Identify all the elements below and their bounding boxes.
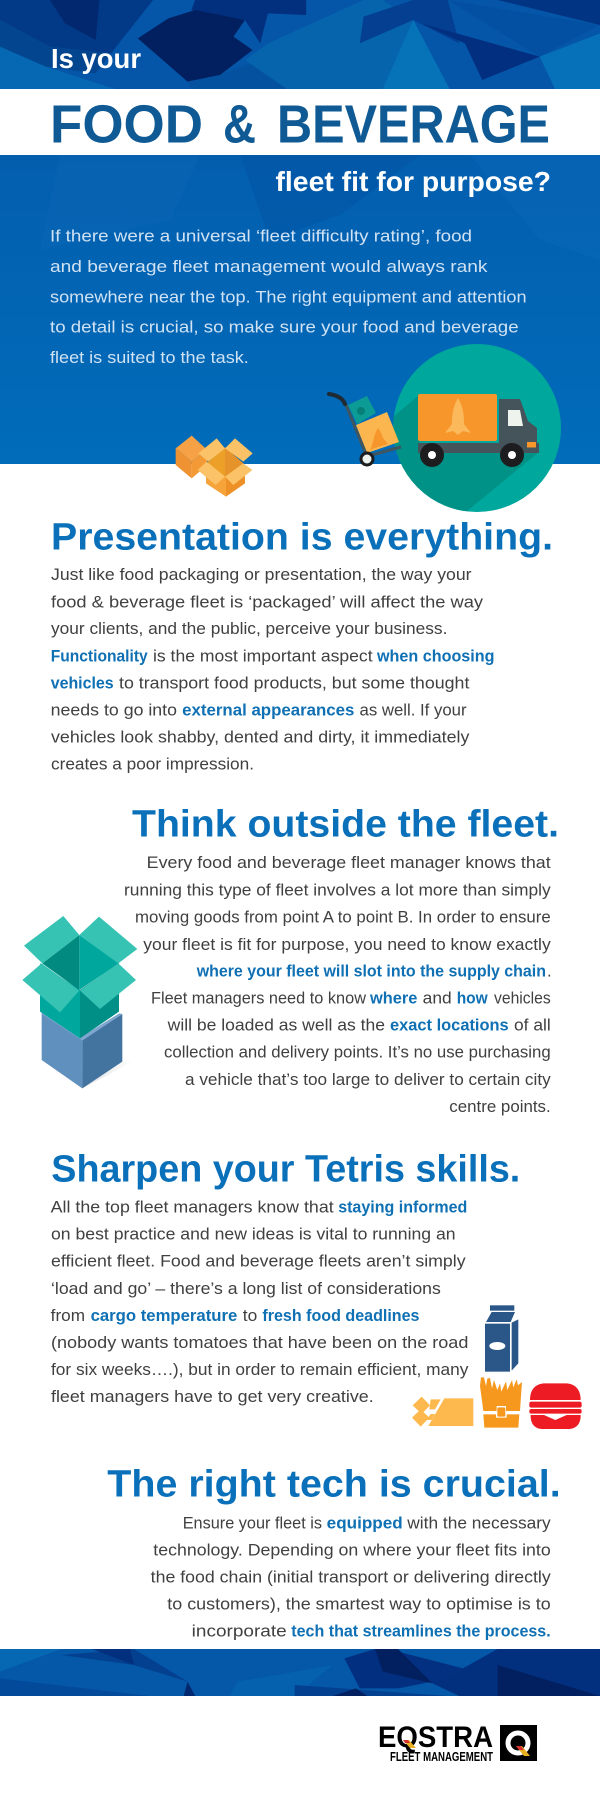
title: food and beverage: FOOD xyxy=(50,94,203,154)
body text: staying informed xyxy=(338,1199,467,1217)
body text: fresh food deadlines xyxy=(262,1307,420,1325)
title line: Is your: Is your xyxy=(51,43,141,74)
body text: exact locations xyxy=(390,1017,509,1035)
body text: how xyxy=(457,990,488,1008)
body text xyxy=(151,1514,551,1641)
body text: external appearances xyxy=(182,701,354,719)
body text: the food chain (initial transport or delivering directly xyxy=(151,1569,551,1587)
title: food and beverage xyxy=(50,94,550,154)
body text: incorporate xyxy=(192,1623,287,1641)
body text: cargo temperature xyxy=(91,1307,237,1325)
logo: Eqstra Fleet Management: FLEET MANAGEMENT xyxy=(390,1749,493,1764)
icon: yellow food box xyxy=(412,1397,473,1427)
body text: to xyxy=(243,1307,257,1325)
icon: burger xyxy=(529,1383,582,1429)
body text: a vehicle that’s too large to deliver to certain city xyxy=(185,1071,551,1089)
body text: efficient fleet. Food and beverage fleets aren’t simply xyxy=(51,1253,466,1271)
body text: Just like food packaging or presentation, the way your xyxy=(51,566,472,584)
body text: vehicles xyxy=(51,674,114,692)
intro text xyxy=(50,227,527,367)
body text: where xyxy=(369,990,417,1008)
body text: to customers), the smartest way to optimise is to xyxy=(167,1596,551,1614)
logo: Eqstra Fleet Management xyxy=(378,1721,537,1764)
body text: when choosing xyxy=(376,647,494,665)
footer band xyxy=(0,1649,600,1696)
body text: of all xyxy=(514,1017,551,1035)
icon: milk carton xyxy=(485,1305,518,1372)
icon: truck in teal circle xyxy=(393,344,561,512)
body text: as well. If your xyxy=(360,701,467,719)
body text: equipped xyxy=(327,1514,403,1532)
body text: All the top fleet managers know that xyxy=(51,1199,334,1217)
body text: Every food and beverage fleet manager knows that xyxy=(147,854,551,872)
body text xyxy=(51,1199,469,1406)
body text: your clients, and the public, perceive your business. xyxy=(51,620,447,638)
title band xyxy=(0,89,600,155)
intro text: fleet is suited to the task. xyxy=(50,348,249,367)
body text: from xyxy=(51,1307,85,1325)
body text: and xyxy=(423,990,452,1008)
body text: . xyxy=(547,963,552,981)
body text xyxy=(124,854,552,1116)
heading: Sharpen your Tetris skills. xyxy=(51,1149,520,1191)
icon: hand truck with boxes xyxy=(329,394,401,465)
section: the right tech is crucial xyxy=(107,1464,561,1641)
body text: vehicles look shabby, dented and dirty, it immediately xyxy=(51,728,470,746)
body text xyxy=(51,566,494,773)
body text: moving goods from point A to point B. In order to ensure xyxy=(135,908,551,926)
body text: (nobody wants tomatoes that have been on the road xyxy=(51,1334,468,1352)
icon: fries xyxy=(480,1377,522,1428)
icon: open teal box on blue box xyxy=(22,916,137,1088)
body text: food & beverage fleet is ‘packaged’ will affect the way xyxy=(51,593,484,611)
body text: centre points. xyxy=(449,1098,551,1116)
body text: technology. Depending on where your fleet fits into xyxy=(153,1541,551,1559)
body text: fleet managers have to get very creative. xyxy=(51,1388,374,1406)
body text: needs to go into xyxy=(51,701,177,719)
body text: on best practice and new ideas is vital to running an xyxy=(51,1226,456,1244)
body text: your fleet is fit for purpose, you need to know exactly xyxy=(143,936,551,954)
body text: vehicles xyxy=(494,990,551,1008)
section: think outside the fleet xyxy=(124,804,559,1116)
body text: is the most important aspect xyxy=(153,647,373,665)
body text: Ensure your fleet is xyxy=(183,1514,322,1532)
body text: where your fleet will slot into the supply chain xyxy=(196,963,546,981)
title: food and beverage: & xyxy=(223,94,256,154)
intro text: If there were a universal ‘fleet difficulty rating’, food xyxy=(50,227,472,246)
intro text: somewhere near the top. The right equipment and attention xyxy=(50,287,527,306)
icons: food items xyxy=(412,1305,582,1429)
body text: to transport food products, but some thought xyxy=(119,674,470,692)
body text: for six weeks….), but in order to remain efficient, many xyxy=(51,1361,469,1379)
body text: will be loaded as well as the xyxy=(167,1017,385,1035)
section: sharpen your tetris skills xyxy=(51,1149,520,1406)
icon: orange boxes xyxy=(176,436,253,497)
section: presentation is everything xyxy=(51,516,553,773)
body text: tech that streamlines the process. xyxy=(291,1623,551,1641)
heading: Presentation is everything. xyxy=(51,516,553,558)
logo: Eqstra Fleet Management: EQSTRA xyxy=(378,1721,493,1754)
title line: fleet fit for purpose: fleet fit for purpose? xyxy=(276,166,551,197)
body text: with the necessary xyxy=(406,1514,551,1532)
body text: Functionality xyxy=(51,647,148,665)
intro text: and beverage fleet management would always rank xyxy=(50,257,488,276)
intro text: to detail is crucial, so make sure your food and beverage xyxy=(50,318,519,337)
heading: Think outside the fleet. xyxy=(132,804,559,846)
body text: running this type of fleet involves a lot more than simply xyxy=(124,881,551,899)
body text: ‘load and go’ – there’s a long list of considerations xyxy=(51,1280,441,1298)
header background xyxy=(0,0,600,464)
heading: The right tech is crucial. xyxy=(107,1464,561,1506)
title: food and beverage: BEVERAGE xyxy=(277,94,550,154)
body text: creates a poor impression. xyxy=(51,755,254,773)
body text: Fleet managers need to know xyxy=(151,990,366,1008)
body text: collection and delivery points. It’s no use purchasing xyxy=(164,1044,551,1062)
